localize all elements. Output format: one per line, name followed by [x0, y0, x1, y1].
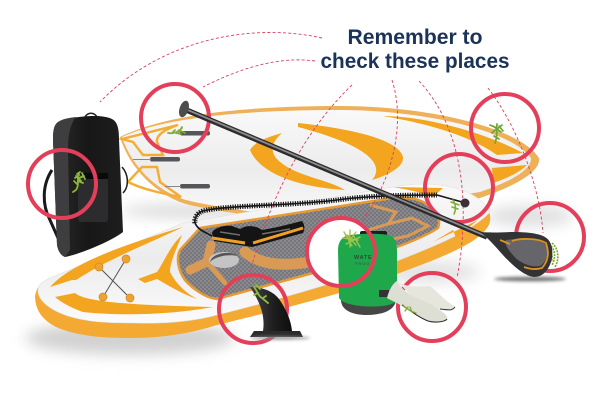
deck pad pattern [190, 226, 322, 283]
algae on board nose [490, 124, 503, 143]
waterproof dry bag: PROO [355, 262, 370, 266]
bungee cross with anchors [95, 255, 134, 302]
highlight circle: dry bag [307, 218, 375, 286]
ankle strap [212, 221, 304, 247]
shadows beneath boards [25, 204, 574, 355]
highlight circle: shoes [398, 273, 466, 341]
back paddle board [120, 106, 539, 225]
dashed connector lines [100, 32, 543, 278]
white fill of dry bag highlight circle [307, 218, 375, 286]
heading: Remember to [348, 26, 482, 49]
waterproof dry bag [338, 231, 397, 315]
algae on back board [168, 127, 185, 134]
travel bag [44, 113, 127, 257]
algae on bag [73, 172, 85, 192]
shoes [387, 281, 455, 322]
highlight circle: bag [28, 150, 96, 218]
highlight circle: fin [219, 275, 287, 343]
algae on dry bag [343, 230, 360, 247]
highlight circle: top of paddle [141, 84, 209, 152]
paddle blade [480, 232, 552, 277]
deck handle hole [209, 252, 239, 268]
centre crescent [250, 133, 345, 190]
paddle shaft [184, 109, 487, 237]
coiled leash [195, 195, 462, 236]
dry bag label: WATE [354, 255, 372, 261]
algae on blade [550, 243, 558, 267]
algae on leash [451, 200, 459, 214]
highlight circle: board nose [471, 94, 539, 162]
front paddle board [35, 184, 490, 338]
fin [250, 287, 310, 340]
grey deck pad [178, 198, 439, 299]
paddle handle [177, 100, 191, 118]
heading [320, 26, 510, 73]
nose graphics [50, 227, 213, 314]
tail graphics [122, 125, 181, 197]
leash anchor [460, 198, 470, 208]
highlight circle: paddle blade [516, 203, 584, 271]
algae on fin [254, 285, 268, 303]
algae on shoes [403, 305, 416, 313]
deck fins [133, 131, 210, 188]
heading: check these places [320, 50, 510, 73]
paddle blade shadow [494, 277, 566, 281]
highlight circle: leash [425, 154, 493, 222]
tail graphics front board [393, 187, 478, 242]
